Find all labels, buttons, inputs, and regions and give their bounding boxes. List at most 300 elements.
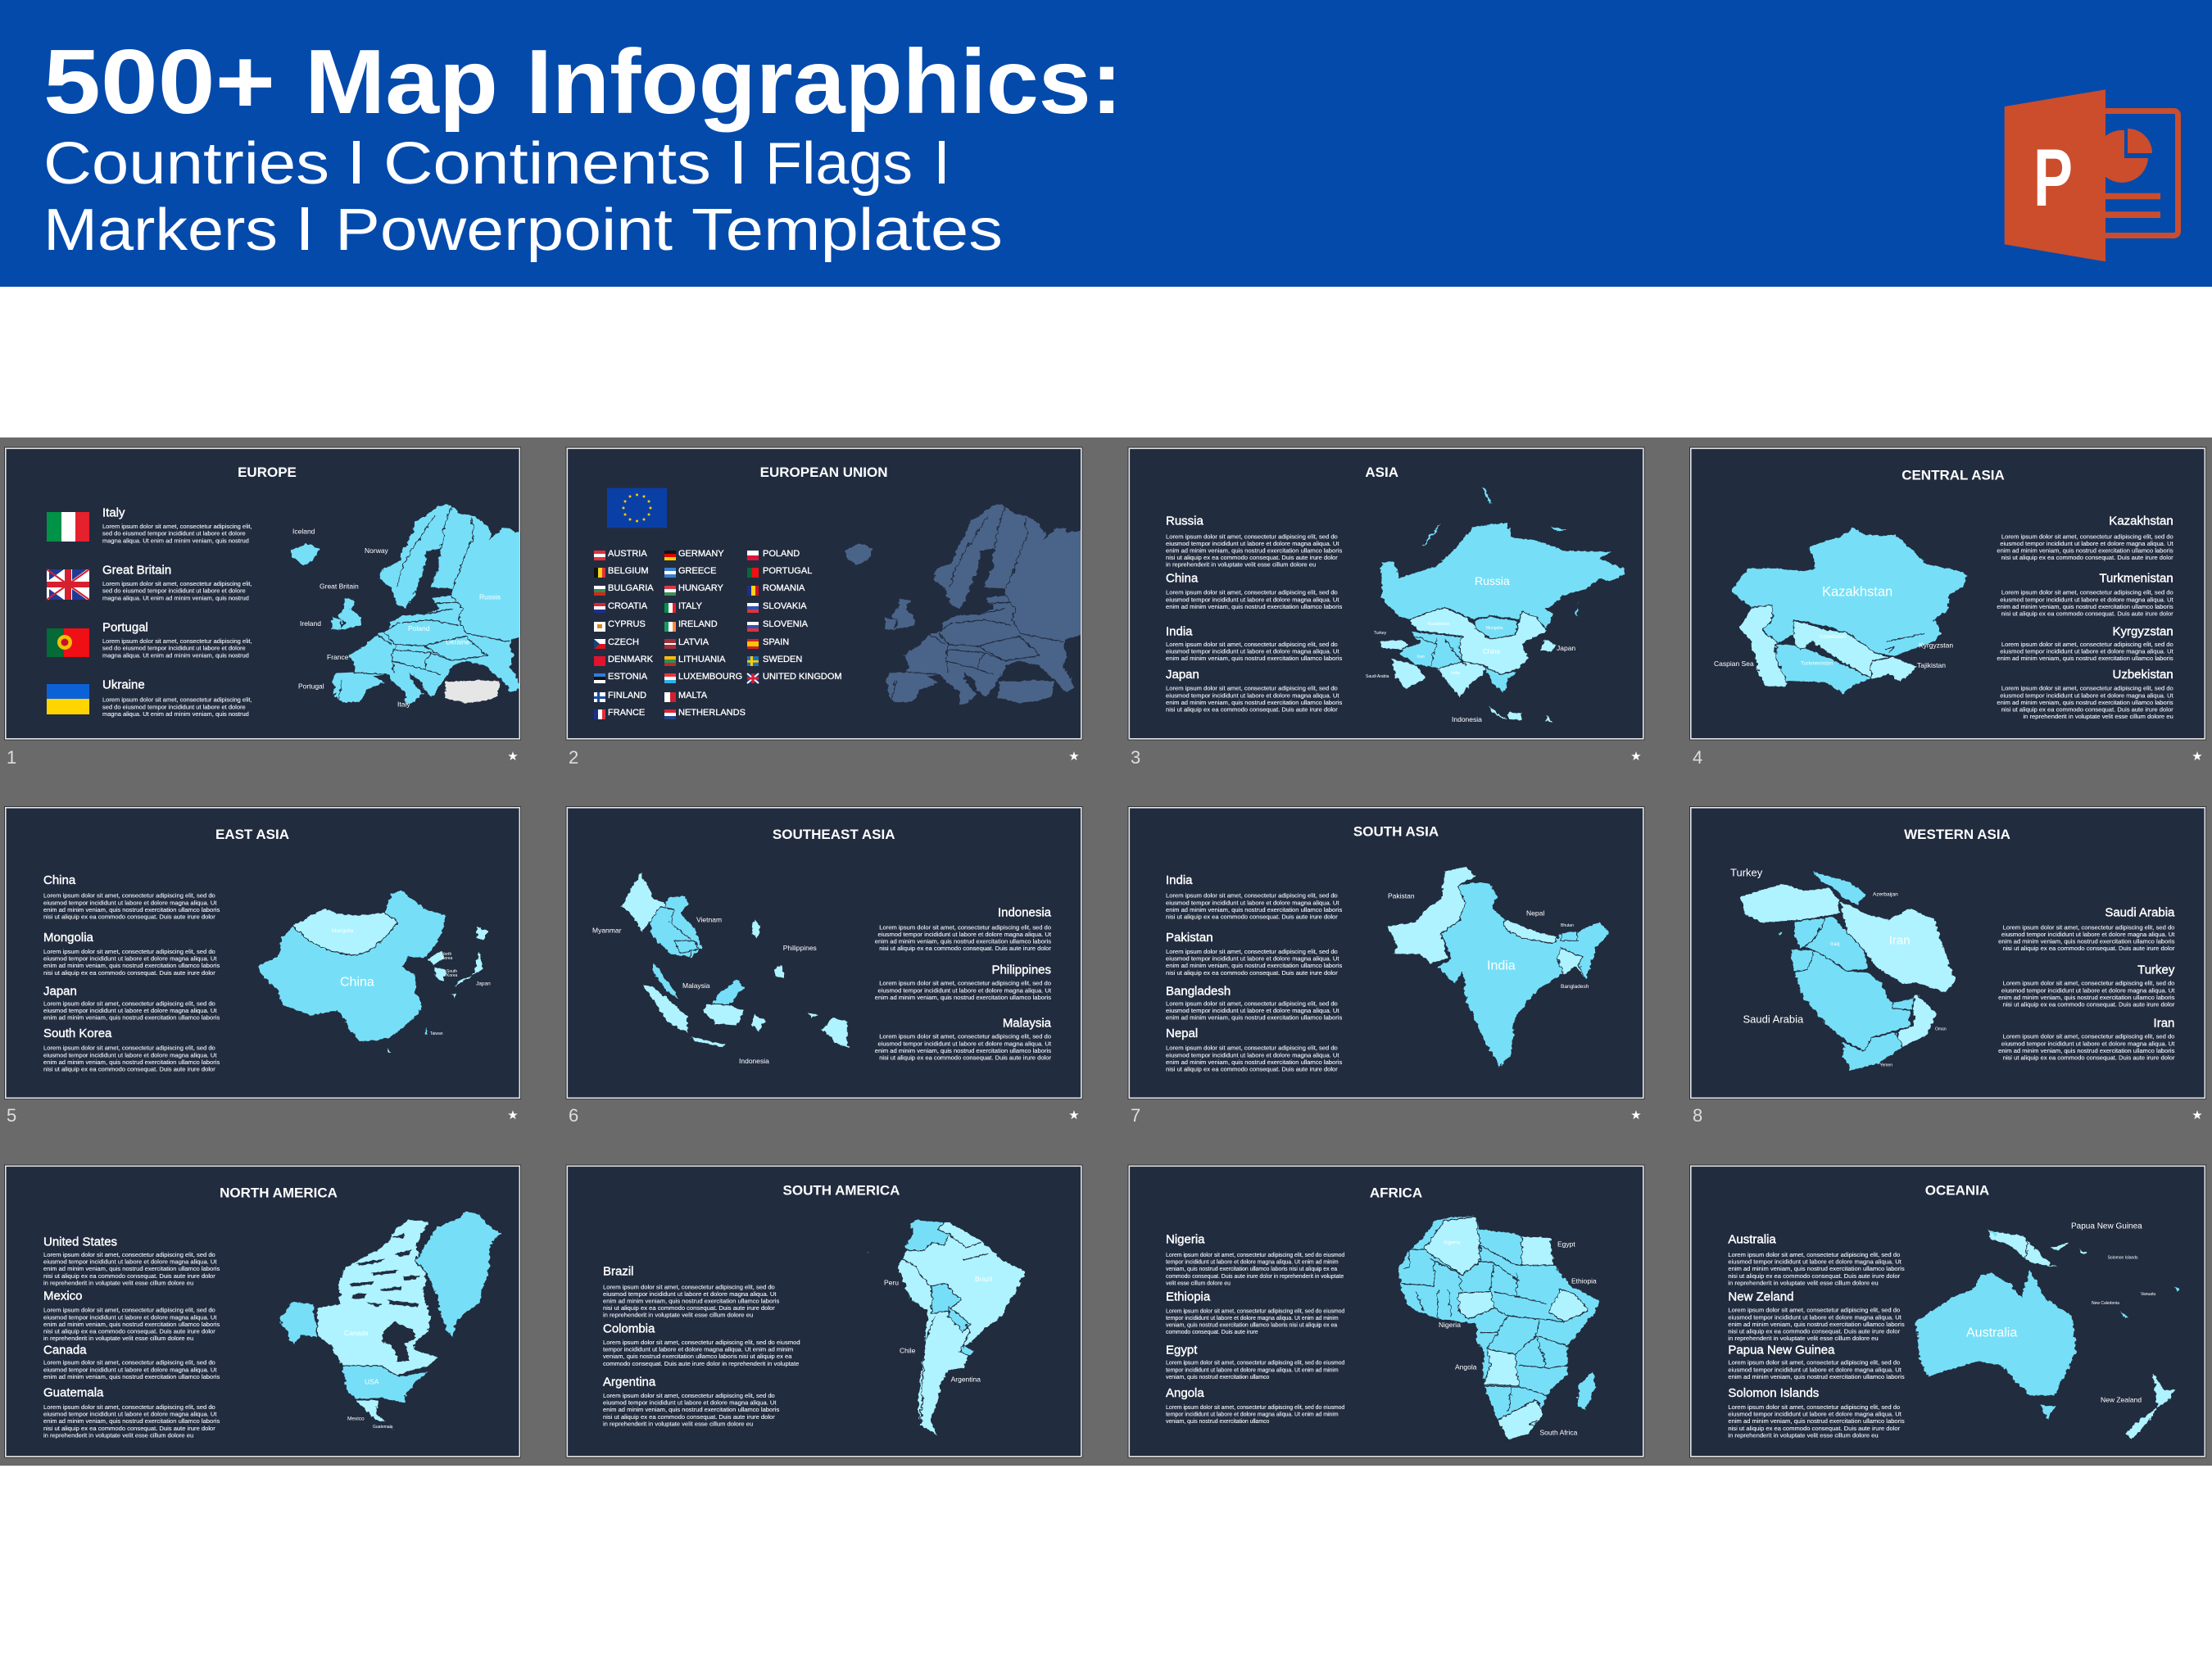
text: Russia: Russia bbox=[1166, 514, 1204, 528]
slide number: 7 bbox=[1131, 1105, 1140, 1126]
list: EU countries with flags: POLAND bbox=[763, 549, 800, 559]
text: Bangladesh bbox=[1166, 984, 1342, 1021]
text: Nigeria: velit esse cillum dolore eu bbox=[1166, 1281, 1231, 1286]
text: Malaysia: Lorem ipsum dolor sit amet, consectetur adipiscing elit, sed do bbox=[879, 1033, 1051, 1040]
text: Canada: enim ad minim veniam, quis nostrud exercitation ullamco laboris bbox=[43, 1373, 220, 1380]
map labels: Europe: Great Britain bbox=[320, 582, 359, 591]
list: EU countries with flags bbox=[594, 549, 842, 719]
text: Portugal: Portugal bbox=[102, 621, 148, 635]
text: United States: in reprehenderit in voluptate velit esse cillum dolore eu bbox=[43, 1279, 193, 1286]
text: Kyrgyzstan: eiusmod tempor incididunt ut labore et dolore magna aliqua. Ut bbox=[2000, 648, 2174, 655]
text: Canada: eiusmod tempor incididunt ut labore et dolore magna aliqua. Ut bbox=[43, 1366, 217, 1373]
map labels: Oceania: Papua New Guinea bbox=[2071, 1222, 2142, 1231]
text: Pakistan: Pakistan bbox=[1166, 931, 1213, 945]
text: Portugal: magna aliqua. Ut enim ad minim veniam, quis nostrud bbox=[102, 651, 249, 659]
map labels: Europe: Norway bbox=[365, 546, 389, 555]
map labels: Western Asia: Azerbaijan bbox=[1873, 891, 1898, 897]
flag: Great Britain bbox=[47, 569, 89, 600]
text: Brazil: eiusmod tempor incididunt ut labore et dolore magna aliqua. Ut bbox=[603, 1290, 777, 1298]
list: EU countries with flags: ITALY bbox=[678, 601, 703, 611]
slide title: ASIA bbox=[1365, 465, 1398, 480]
text: Nepal bbox=[1166, 1027, 1342, 1073]
list: EU countries with flags: SPAIN bbox=[763, 637, 789, 647]
text: Italy: sed do eiusmod tempor incididunt ut labore et dolore bbox=[102, 530, 246, 537]
text: Kazakhstan: eiusmod tempor incididunt ut labore et dolore magna aliqua. Ut bbox=[2000, 540, 2174, 547]
text: Japan: Lorem ipsum dolor sit amet, consectetur adipiscing elit, sed do bbox=[43, 999, 215, 1007]
icon: PowerPoint logo: P bbox=[2033, 132, 2073, 223]
text: Colombia: Colombia bbox=[603, 1322, 655, 1336]
text: Turkey: enim ad minim veniam, quis nostrud exercitation ullamco laboris bbox=[1998, 994, 2175, 1001]
text: Ethiopia: Ethiopia bbox=[1166, 1290, 1211, 1303]
text: China: China bbox=[43, 873, 76, 887]
map labels: Europe: Poland bbox=[408, 624, 430, 632]
slide 4: Central Asia bbox=[1689, 447, 2206, 768]
text: Japan: enim ad minim veniam, quis nostrud exercitation ullamco laboris bbox=[43, 1014, 220, 1021]
slide title: OCEANIA bbox=[1925, 1182, 1989, 1198]
text: Ethiopia: Lorem ipsum dolor sit amet, consectetur adipiscing elit, sed do eiusmod bbox=[1166, 1308, 1344, 1314]
text: Australia bbox=[1728, 1232, 1905, 1286]
list: EU countries with flags: LITHUANIA bbox=[678, 655, 726, 664]
text: Saudi Arabia: Lorem ipsum dolor sit amet, consectetur adipiscing elit, sed do bbox=[2003, 923, 2174, 931]
text: Uzbekistan: nisi ut aliquip ex ea commodo consequat. Duis aute irure dolor bbox=[2001, 706, 2173, 713]
list: EU countries with flags: SWEDEN bbox=[763, 655, 802, 664]
list: EU countries with flags: NETHERLANDS bbox=[678, 708, 746, 718]
map: Africa bbox=[1398, 1216, 1600, 1440]
map labels: Southeast Asia: Vietnam bbox=[696, 916, 722, 924]
text: Guatemala: Guatemala bbox=[43, 1385, 104, 1399]
text: United States bbox=[43, 1235, 220, 1286]
map labels: South Asia: Pakistan bbox=[1388, 892, 1415, 900]
map: South Asia bbox=[1387, 866, 1611, 1067]
text: New Zeland: eiusmod tempor incididunt ut labore et dolore magna aliqua. Ut bbox=[1728, 1313, 1902, 1321]
slide title: AFRICA bbox=[1370, 1185, 1422, 1201]
text: Portugal bbox=[102, 621, 252, 659]
map: Asia bbox=[1378, 486, 1626, 723]
map labels: Europe: Italy bbox=[397, 700, 410, 708]
text: Malaysia: nisi ut aliquip ex ea commodo consequat. Duis aute irure dolor bbox=[879, 1054, 1051, 1062]
text: Guatemala: enim ad minim veniam, quis nostrud exercitation ullamco laboris bbox=[43, 1417, 220, 1425]
text: Nigeria: Nigeria bbox=[1166, 1232, 1205, 1246]
icon: star: ★ bbox=[1630, 1108, 1642, 1122]
list: EU countries with flags: CYPRUS bbox=[608, 619, 646, 629]
text: New Zeland: enim ad minim veniam, quis nostrud exercitation ullamco laboris bbox=[1728, 1321, 1905, 1328]
map: South America bbox=[866, 1219, 1027, 1436]
text: Great Britain: sed do eiusmod tempor incididunt ut labore et dolore bbox=[102, 587, 246, 595]
text: Ukraine bbox=[102, 678, 252, 718]
text: Philippines: eiusmod tempor incididunt ut labore et dolore magna aliqua. Ut bbox=[878, 986, 1052, 994]
slide number: 8 bbox=[1693, 1105, 1702, 1126]
text: Japan: enim ad minim veniam, quis nostrud exercitation ullamco laboris bbox=[1166, 699, 1342, 706]
slide title: WESTERN ASIA bbox=[1904, 827, 2010, 842]
map labels: Central Asia: Caspian Sea bbox=[1714, 660, 1754, 668]
text: Japan bbox=[1166, 668, 1342, 713]
slide 12: Oceania bbox=[1689, 1165, 2206, 1458]
map labels: Africa: Ethiopia bbox=[1571, 1277, 1597, 1285]
text: Nigeria: Lorem ipsum dolor sit amet, consectetur adipiscing elit, sed do eiusmod bbox=[1166, 1253, 1344, 1258]
text: Papua New Guinea: Lorem ipsum dolor sit amet, consectetur adipiscing elit, sed do bbox=[1728, 1359, 1900, 1367]
text: Ethiopia: tempor incididunt ut labore et dolore magna aliqua. Ut enim ad minim bbox=[1166, 1316, 1339, 1321]
text: Malaysia: enim ad minim veniam, quis nostrud exercitation ullamco laboris bbox=[875, 1047, 1051, 1054]
icon: star: ★ bbox=[2192, 749, 2203, 764]
map labels: Africa: Algeria bbox=[1444, 1240, 1461, 1245]
slide 3: Asia bbox=[1127, 447, 1645, 768]
list: EU countries with flags: AUSTRIA bbox=[608, 549, 647, 559]
map labels: Asia: China bbox=[1483, 648, 1500, 655]
map labels: Oceania: New Zealand bbox=[2101, 1396, 2142, 1404]
text: Colombia: Lorem ipsum dolor sit amet, consectetur adipiscing elit, sed do eiusmod bbox=[603, 1339, 800, 1346]
slide 11: Africa bbox=[1127, 1165, 1645, 1458]
text: Italy: Italy bbox=[102, 506, 125, 520]
slide 2: European Union bbox=[565, 447, 1083, 768]
text: Russia: eiusmod tempor incididunt ut labore et dolore magna aliqua. Ut bbox=[1166, 540, 1339, 547]
text: China: Lorem ipsum dolor sit amet, consectetur adipiscing elit, sed do bbox=[43, 892, 215, 900]
text: Uzbekistan: Uzbekistan bbox=[2112, 668, 2173, 682]
subtitle: Templates bbox=[691, 197, 1003, 263]
slide 5: East Asia bbox=[4, 806, 521, 1126]
list: EU countries with flags: PORTUGAL bbox=[763, 566, 812, 576]
map labels: Africa: South Africa bbox=[1540, 1429, 1578, 1437]
text: Great Britain: Great Britain bbox=[102, 564, 171, 578]
text: China: eiusmod tempor incididunt ut labore et dolore magna aliqua. Ut bbox=[43, 899, 217, 906]
map labels: Southeast Asia: Indonesia bbox=[739, 1057, 769, 1065]
text: Solomon Islands: Lorem ipsum dolor sit amet, consectetur adipiscing elit, sed do bbox=[1728, 1403, 1900, 1411]
text: Great Britain: Lorem ipsum dolor sit amet, consectetur adipiscing elit, bbox=[102, 580, 252, 587]
text: Argentina: in reprehenderit in voluptate velit esse cillum dolore eu bbox=[603, 1420, 753, 1427]
slide title: EUROPEAN UNION bbox=[760, 465, 888, 480]
map labels: Central Asia: Turkmenistan bbox=[1801, 661, 1834, 667]
text: Mexico: in reprehenderit in voluptate velit esse cillum dolore eu bbox=[43, 1335, 193, 1342]
text: Great Britain: magna aliqua. Ut enim ad minim veniam, quis nostrud bbox=[102, 594, 249, 601]
map labels: South America: Argentina bbox=[951, 1376, 981, 1384]
text: Guatemala: in reprehenderit in voluptate velit esse cillum dolore eu bbox=[43, 1431, 193, 1439]
subtitle: Markers bbox=[43, 197, 278, 263]
flag: Portugal bbox=[47, 628, 89, 657]
text: Solomon Islands: enim ad minim veniam, quis nostrud exercitation ullamco laboris bbox=[1728, 1417, 1905, 1425]
map labels: Asia: India bbox=[1451, 671, 1460, 676]
map labels: Western Asia: Yemen bbox=[1880, 1063, 1892, 1068]
text: Canada bbox=[43, 1343, 220, 1380]
text: Uzbekistan bbox=[1997, 668, 2174, 720]
subtitle bbox=[43, 131, 1003, 263]
flag: Ukraine bbox=[47, 684, 89, 714]
text: Argentina bbox=[603, 1376, 779, 1427]
slide 10: South America bbox=[565, 1165, 1083, 1458]
text: Egypt bbox=[1166, 1343, 1344, 1380]
icon: PowerPoint logo bbox=[2005, 89, 2178, 261]
map: East Asia bbox=[257, 890, 489, 1053]
text: Russia: enim ad minim veniam, quis nostrud exercitation ullamco laboris bbox=[1166, 547, 1342, 554]
text: China: eiusmod tempor incididunt ut labore et dolore magna aliqua. Ut bbox=[1166, 596, 1339, 603]
map: Western Asia bbox=[1739, 871, 1956, 1071]
text: Papua New Guinea bbox=[1728, 1343, 1905, 1380]
map labels: Europe: Iceland bbox=[292, 528, 315, 536]
text: Saudi Arabia: nisi ut aliquip ex ea commodo consequat. Duis aute irure dolor bbox=[2003, 945, 2175, 952]
map labels: Central Asia: Uzbekistan bbox=[1820, 634, 1847, 640]
map labels: South Asia: Bangladesh bbox=[1561, 984, 1589, 990]
text: Kazakhstan: enim ad minim veniam, quis nostrud exercitation ullamco laboris bbox=[1997, 547, 2173, 554]
text: Colombia: tempor incididunt ut labore et dolore magna aliqua. Ut enim ad minim bbox=[603, 1346, 793, 1353]
text: Mongolia: eiusmod tempor incididunt ut labore et dolore magna aliqua. Ut bbox=[43, 955, 217, 963]
map labels: Southeast Asia: Philippines bbox=[783, 944, 817, 952]
map labels: Oceania: Australia bbox=[1966, 1326, 2017, 1340]
text: Mexico bbox=[43, 1290, 220, 1342]
map labels: Asia: Mongolia bbox=[1486, 626, 1503, 631]
map labels: Europe: Portugal bbox=[298, 682, 324, 691]
map labels: East Asia: Mongolia bbox=[332, 928, 354, 934]
slide 7: South Asia bbox=[1127, 806, 1645, 1126]
text: Argentina: enim ad minim veniam, quis nostrud exercitation ullamco laboris bbox=[603, 1406, 779, 1413]
slide title: EAST ASIA bbox=[215, 827, 289, 842]
map labels: Asia: Saudi Arabia bbox=[1366, 674, 1389, 679]
list: EU countries with flags: GERMANY bbox=[678, 549, 724, 559]
text: Angola: veniam, quis nostrud exercitation ullamco bbox=[1166, 1419, 1270, 1425]
slide title: CENTRAL ASIA bbox=[1902, 468, 2005, 483]
text: Kyrgyzstan bbox=[1997, 625, 2174, 662]
map labels: Central Asia: Tajikistan bbox=[1917, 661, 1946, 669]
text: Brazil: Brazil bbox=[603, 1265, 634, 1279]
slide title: SOUTHEAST ASIA bbox=[773, 827, 895, 842]
text: Uzbekistan: eiusmod tempor incididunt ut labore et dolore magna aliqua. Ut bbox=[2000, 691, 2174, 699]
map labels: Western Asia: Iraq bbox=[1830, 941, 1840, 947]
map labels: Western Asia: Saudi Arabia bbox=[1743, 1013, 1804, 1025]
map labels: North America: Guatemala bbox=[373, 1425, 393, 1430]
text: Kyrgyzstan: Lorem ipsum dolor sit amet, consectetur adipiscing elit, sed do bbox=[2001, 641, 2173, 648]
text: Nigeria: tempor incididunt ut labore et dolore magna aliqua. Ut enim ad minim bbox=[1166, 1260, 1339, 1266]
slide 8: Western Asia bbox=[1689, 806, 2206, 1126]
text: New Zeland: nisi ut aliquip ex ea commodo consequat. Duis aute irure dolor bbox=[1728, 1327, 1901, 1335]
title: Infographics: bbox=[526, 31, 1122, 133]
slide 6: Southeast Asia bbox=[565, 806, 1083, 1126]
map labels: East Asia: Taiwan bbox=[430, 1031, 443, 1036]
text: Argentina: eiusmod tempor incididunt ut labore et dolore magna aliqua. Ut bbox=[603, 1399, 777, 1407]
text: Solomon Islands: in reprehenderit in voluptate velit esse cillum dolore eu bbox=[1728, 1431, 1879, 1439]
text: India: Lorem ipsum dolor sit amet, consectetur adipiscing elit, sed do bbox=[1166, 892, 1338, 900]
text: Indonesia: Indonesia bbox=[998, 905, 1052, 919]
text: Australia: nisi ut aliquip ex ea commodo consequat. Duis aute irure dolor bbox=[1728, 1272, 1901, 1280]
text: India: enim ad minim veniam, quis nostrud exercitation ullamco laboris bbox=[1166, 906, 1342, 913]
text: South Korea: South Korea bbox=[43, 1027, 112, 1040]
text: Indonesia: nisi ut aliquip ex ea commodo consequat. Duis aute irure dolor bbox=[879, 945, 1051, 952]
subtitle: Countries bbox=[43, 131, 329, 197]
map labels: Europe: Ukraine bbox=[446, 638, 470, 646]
text: Egypt: Egypt bbox=[1166, 1343, 1198, 1357]
map labels: Europe: France bbox=[327, 653, 349, 661]
text: Turkey: eiusmod tempor incididunt ut labore et dolore magna aliqua. Ut bbox=[2001, 986, 2175, 994]
map labels: Asia: Iran bbox=[1417, 655, 1425, 660]
text: United States: eiusmod tempor incididunt ut labore et dolore magna aliqua. Ut bbox=[43, 1258, 217, 1266]
text: Indonesia: Lorem ipsum dolor sit amet, consectetur adipiscing elit, sed do bbox=[879, 923, 1051, 931]
text: Pakistan: enim ad minim veniam, quis nostrud exercitation ullamco laboris bbox=[1166, 962, 1342, 969]
map labels: Africa: Nigeria bbox=[1439, 1321, 1461, 1329]
map labels: North America: Mexico bbox=[347, 1416, 365, 1421]
text: Colombia: veniam, quis nostrud exercitation ullamco laboris nisi ut aliquip ex ea bbox=[603, 1353, 792, 1360]
text: Philippines: Philippines bbox=[991, 963, 1051, 977]
text: Brazil bbox=[603, 1265, 779, 1319]
slide title: SOUTH ASIA bbox=[1353, 824, 1439, 840]
text: India bbox=[1166, 873, 1342, 921]
text: Ukraine: sed do eiusmod tempor incididunt ut labore et dolore bbox=[102, 703, 246, 710]
text: India: Lorem ipsum dolor sit amet, consectetur adipiscing elit, sed do bbox=[1166, 641, 1338, 648]
text: Japan: Japan bbox=[1166, 668, 1199, 682]
text: Russia bbox=[1166, 514, 1342, 569]
header banner bbox=[0, 0, 2212, 287]
text: South Korea: eiusmod tempor incididunt ut labore et dolore magna aliqua. Ut bbox=[43, 1051, 217, 1058]
text: Guatemala: eiusmod tempor incididunt ut labore et dolore magna aliqua. Ut bbox=[43, 1411, 217, 1418]
text: Mongolia bbox=[43, 931, 220, 977]
text: United States: United States bbox=[43, 1235, 117, 1249]
text: Brazil: in reprehenderit in voluptate velit esse cillum dolore eu bbox=[603, 1312, 753, 1319]
slide number: 3 bbox=[1131, 747, 1140, 768]
slide number: 1 bbox=[7, 747, 16, 768]
text: Japan: eiusmod tempor incididunt ut labore et dolore magna aliqua. Ut bbox=[43, 1007, 217, 1014]
text: Nepal: enim ad minim veniam, quis nostrud exercitation ullamco laboris bbox=[1166, 1058, 1342, 1066]
map labels: Western Asia: Oman bbox=[1935, 1027, 1947, 1032]
text: Angola: Lorem ipsum dolor sit amet, consectetur adipiscing elit, sed do eiusmod bbox=[1166, 1405, 1344, 1411]
text: Iran: Iran bbox=[2154, 1016, 2174, 1030]
text: Japan: nisi ut aliquip ex ea commodo consequat. Duis aute irure dolor bbox=[1166, 706, 1338, 713]
text: Ukraine: Lorem ipsum dolor sit amet, consectetur adipiscing elit, bbox=[102, 696, 252, 704]
text: Colombia bbox=[603, 1322, 800, 1367]
title: Map bbox=[305, 31, 498, 133]
text: Nepal: Nepal bbox=[1166, 1027, 1198, 1040]
list: EU countries with flags: FRANCE bbox=[608, 708, 645, 718]
title bbox=[43, 31, 1122, 133]
text: Mongolia: Lorem ipsum dolor sit amet, consectetur adipiscing elit, sed do bbox=[43, 948, 215, 955]
text: Russia: Lorem ipsum dolor sit amet, consectetur adipiscing elit, sed do bbox=[1166, 533, 1338, 540]
text: Pakistan: nisi ut aliquip ex ea commodo consequat. Duis aute irure dolor bbox=[1166, 969, 1338, 977]
map: Europe bbox=[291, 505, 529, 705]
map labels: Central Asia: Kazakhstan bbox=[1822, 584, 1892, 599]
text: Turkey: nisi ut aliquip ex ea commodo consequat. Duis aute irure dolor bbox=[2003, 1001, 2175, 1008]
text: Brazil: nisi ut aliquip ex ea commodo consequat. Duis aute irure dolor bbox=[603, 1304, 775, 1312]
list: EU countries with flags: UNITED KINGDOM bbox=[763, 672, 842, 682]
text: Kyrgyzstan: Kyrgyzstan bbox=[2112, 625, 2173, 639]
icon: star: ★ bbox=[507, 1108, 519, 1122]
text: Turkmenistan: nisi ut aliquip ex ea commodo consequat. Duis aute irure dolor bbox=[2001, 610, 2173, 618]
text: Mexico: eiusmod tempor incididunt ut labore et dolore magna aliqua. Ut bbox=[43, 1313, 217, 1321]
slide number: 4 bbox=[1693, 747, 1702, 768]
list: EU countries with flags: ROMANIA bbox=[763, 583, 805, 593]
map labels: Oceania: Solomon Islands bbox=[2108, 1256, 2138, 1261]
text: Egypt: Lorem ipsum dolor sit amet, consectetur adipiscing elit, sed do eiusmod bbox=[1166, 1361, 1344, 1367]
map labels: East Asia: China bbox=[340, 975, 374, 989]
text: Philippines: Lorem ipsum dolor sit amet, consectetur adipiscing elit, sed do bbox=[879, 980, 1051, 987]
map labels: North America: Canada bbox=[344, 1329, 369, 1337]
text: Kazakhstan: nisi ut aliquip ex ea commodo consequat. Duis aute irure dolor bbox=[2001, 554, 2173, 561]
map labels: Europe bbox=[292, 528, 501, 708]
text: Malaysia: eiusmod tempor incididunt ut labore et dolore magna aliqua. Ut bbox=[878, 1040, 1052, 1047]
text: United States: enim ad minim veniam, quis nostrud exercitation ullamco laboris bbox=[43, 1265, 220, 1272]
map: Southeast Asia bbox=[621, 871, 848, 1049]
text: Italy bbox=[102, 506, 252, 544]
text: Malaysia bbox=[875, 1016, 1052, 1062]
text: Saudi Arabia bbox=[1998, 905, 2175, 952]
text: Australia: Australia bbox=[1728, 1232, 1776, 1246]
text: Japan: Lorem ipsum dolor sit amet, consectetur adipiscing elit, sed do bbox=[1166, 685, 1338, 692]
text: Japan: Japan bbox=[43, 984, 77, 998]
text: Australia: Lorem ipsum dolor sit amet, consectetur adipiscing elit, sed do bbox=[1728, 1251, 1900, 1258]
text: Turkmenistan bbox=[1997, 572, 2174, 618]
text: Iran: eiusmod tempor incididunt ut labore et dolore magna aliqua. Ut bbox=[2001, 1040, 2175, 1047]
text: Nepal: eiusmod tempor incididunt ut labore et dolore magna aliqua. Ut bbox=[1166, 1051, 1339, 1058]
map labels: Asia: Russia bbox=[1475, 574, 1510, 587]
title: 500+ bbox=[43, 31, 275, 133]
icon: star: ★ bbox=[2192, 1108, 2203, 1122]
map labels: Oceania: Vanuatu bbox=[2141, 1292, 2155, 1297]
list: EU countries with flags: CZECH bbox=[608, 637, 639, 647]
list: EU countries with flags: ESTONIA bbox=[608, 672, 648, 682]
map: North America bbox=[279, 1211, 501, 1435]
map labels: Europe: Ireland bbox=[300, 619, 321, 628]
text: New Zeland: Lorem ipsum dolor sit amet, consectetur adipiscing elit, sed do bbox=[1728, 1307, 1900, 1314]
text: Kyrgyzstan: enim ad minim veniam, quis nostrud exercitation ullamco laboris bbox=[1997, 655, 2173, 662]
map labels: Africa bbox=[1439, 1240, 1597, 1437]
text: Pakistan bbox=[1166, 931, 1342, 977]
list: EU countries with flags: LUXEMBOURG bbox=[678, 672, 742, 682]
text: India: India bbox=[1166, 625, 1193, 639]
flag: European Union bbox=[607, 488, 667, 528]
text: India: nisi ut aliquip ex ea commodo consequat. Duis aute irure dolor bbox=[1166, 913, 1338, 921]
map labels: South Asia: Nepal bbox=[1526, 909, 1544, 918]
slide 9: North America bbox=[4, 1165, 521, 1458]
list: EU countries with flags: BULGARIA bbox=[608, 583, 654, 593]
text: Argentina: Argentina bbox=[603, 1376, 656, 1389]
text: South Korea: Lorem ipsum dolor sit amet, consectetur adipiscing elit, sed do bbox=[43, 1045, 215, 1052]
text: Ukraine: magna aliqua. Ut enim ad minim veniam, quis nostrud bbox=[102, 710, 249, 718]
text: Saudi Arabia: eiusmod tempor incididunt ut labore et dolore magna aliqua. Ut bbox=[2001, 931, 2175, 938]
text: Mexico: Mexico bbox=[43, 1290, 83, 1303]
text: Mongolia: nisi ut aliquip ex ea commodo consequat. Duis aute irure dolor bbox=[43, 969, 215, 977]
slide title: NORTH AMERICA bbox=[220, 1185, 338, 1201]
text: Iran: nisi ut aliquip ex ea commodo consequat. Duis aute irure dolor bbox=[2003, 1054, 2175, 1062]
text: Guatemala bbox=[43, 1385, 220, 1439]
text: India bbox=[1166, 625, 1342, 662]
map labels: South Asia: Bhutan bbox=[1561, 923, 1574, 928]
text: Indonesia: eiusmod tempor incididunt ut labore et dolore magna aliqua. Ut bbox=[878, 931, 1052, 938]
text: Indonesia bbox=[875, 905, 1052, 952]
map labels: Southeast Asia bbox=[592, 916, 817, 1065]
slide number: 2 bbox=[569, 747, 578, 768]
text: Bangladesh: enim ad minim veniam, quis nostrud exercitation ullamco laboris bbox=[1166, 1014, 1342, 1021]
text: Solomon Islands: nisi ut aliquip ex ea commodo consequat. Duis aute irure dolor bbox=[1728, 1425, 1901, 1432]
slide number: 5 bbox=[7, 1105, 16, 1126]
text: Kazakhstan: Lorem ipsum dolor sit amet, consectetur adipiscing elit, sed do bbox=[2001, 533, 2173, 540]
text: China: enim ad minim veniam, quis nostrud exercitation ullamco laboris bbox=[43, 906, 220, 913]
slide title: EUROPE bbox=[238, 465, 297, 480]
map labels: East Asia: South bbox=[446, 969, 457, 974]
map labels: Europe: Russia bbox=[479, 593, 501, 601]
map: European Union highlighted bbox=[845, 505, 1083, 705]
text: China: enim ad minim veniam, quis nostrud exercitation ullamco laboris bbox=[1166, 603, 1342, 610]
map labels: South Asia: India bbox=[1487, 959, 1516, 972]
text: Turkey: Turkey bbox=[2137, 963, 2175, 977]
text: China bbox=[43, 873, 220, 921]
text: Mexico: enim ad minim veniam, quis nostrud exercitation ullamco laboris bbox=[43, 1321, 220, 1328]
list: EU countries with flags: BELGIUM bbox=[608, 566, 649, 576]
map labels: Central Asia bbox=[1714, 584, 1953, 669]
map labels: South America: Peru bbox=[884, 1278, 899, 1286]
map labels: Asia bbox=[1366, 574, 1575, 723]
text: Nepal: Lorem ipsum dolor sit amet, consectetur adipiscing elit, sed do bbox=[1166, 1045, 1338, 1052]
text: Solomon Islands bbox=[1728, 1386, 1905, 1439]
text: Uzbekistan: in reprehenderit in voluptate velit esse cillum dolore eu bbox=[2023, 713, 2173, 720]
text: Nigeria: commodo consequat. Duis aute irure dolor in reprehenderit in voluptate bbox=[1166, 1274, 1344, 1280]
text: Iran: Lorem ipsum dolor sit amet, consectetur adipiscing elit, sed do bbox=[2003, 1033, 2174, 1040]
text: China: Lorem ipsum dolor sit amet, consectetur adipiscing elit, sed do bbox=[1166, 589, 1338, 596]
text: South Korea bbox=[43, 1027, 220, 1073]
map labels: Central Asia: Kyrgyzstan bbox=[1919, 641, 1953, 650]
text: Turkey bbox=[1998, 963, 2175, 1008]
